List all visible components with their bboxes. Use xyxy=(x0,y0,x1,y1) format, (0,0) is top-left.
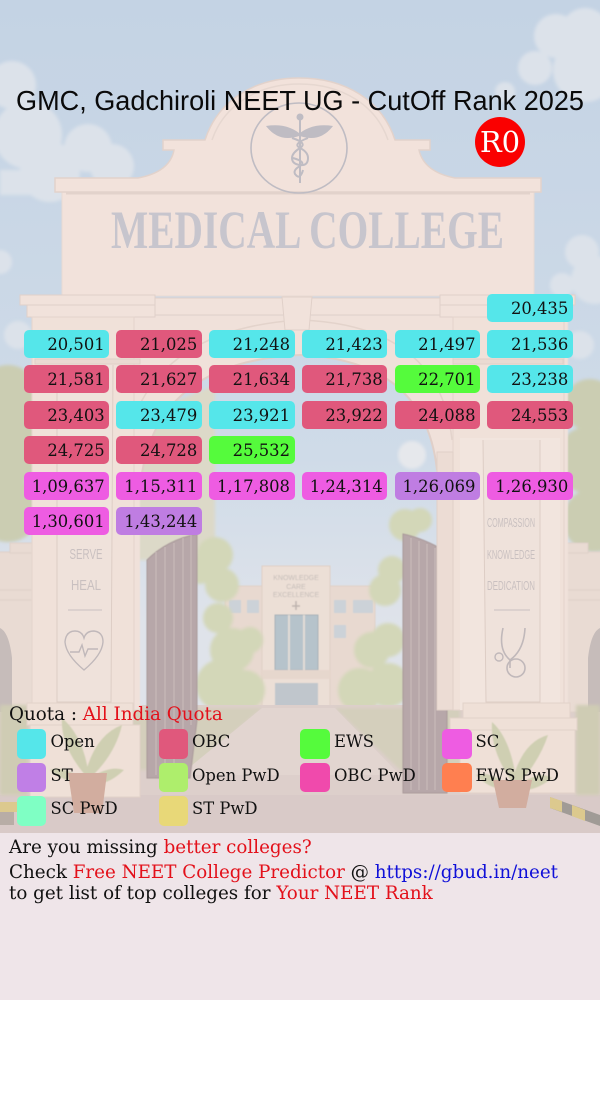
legend: Open: Open xyxy=(50,732,95,751)
campus building: CARE xyxy=(286,584,306,591)
legend: EWS PwD xyxy=(442,763,559,792)
legend: SC PwD xyxy=(17,796,118,826)
row 3: 22,701 xyxy=(418,370,476,389)
arch top tier xyxy=(62,192,534,296)
legend: EWS xyxy=(300,729,374,759)
row 4: 23,921 xyxy=(233,406,290,424)
row 3: 21,581 xyxy=(47,370,105,389)
entablature xyxy=(20,295,575,330)
quota heading: Quota : All India Quota xyxy=(9,704,223,725)
potted plants xyxy=(50,718,552,813)
row 5: 25,532 xyxy=(233,441,290,460)
legend: SC PwD: SC PwD xyxy=(50,799,118,818)
rank chips grid xyxy=(24,294,573,535)
legend: ST PwD: ST PwD xyxy=(192,799,258,818)
promo predictor link: Check Free NEET College Predictor @ https://gbud.in/neet xyxy=(9,862,558,883)
row 6: 1,24,314 xyxy=(310,476,383,496)
campus building: EXCELLENCE xyxy=(273,592,319,599)
legend: ST: ST xyxy=(50,766,73,784)
row 7 xyxy=(24,507,202,535)
row 6: 1,15,311 xyxy=(124,476,197,496)
row 3: 21,738 xyxy=(325,370,383,389)
row 4: 23,922 xyxy=(325,406,383,424)
legend: SC: SC xyxy=(476,732,499,751)
legend: Open PwD: Open PwD xyxy=(192,766,280,784)
campus building: KNOWLEDGE xyxy=(273,575,319,582)
row 4: 24,553 xyxy=(511,406,568,424)
row 4: 23,479 xyxy=(140,406,197,424)
curb stripes xyxy=(0,797,600,826)
lower promo band xyxy=(0,833,600,1000)
row 2 xyxy=(24,330,573,358)
row 1 xyxy=(487,294,573,322)
row 5: 24,725 xyxy=(47,441,105,460)
legend: EWS PwD: EWS PwD xyxy=(476,766,559,784)
promo rank line: to get list of top colleges for Your NEET Rank xyxy=(9,883,433,904)
outer hedges xyxy=(0,705,600,795)
pillar left: HEAL xyxy=(71,577,101,594)
legend: Open xyxy=(17,729,95,759)
row 4: 23,403 xyxy=(47,406,105,424)
row 6: 1,17,808 xyxy=(217,476,290,496)
row 3: 23,238 xyxy=(511,370,568,389)
legend: OBC xyxy=(159,729,230,759)
round badge R0: R0 xyxy=(480,125,520,159)
pillar right: KNOWLEDGE xyxy=(487,547,535,562)
legend: OBC PwD: OBC PwD xyxy=(334,766,416,784)
iron gates xyxy=(147,534,447,793)
row 6: 1,09,637 xyxy=(32,476,105,496)
row 2: 21,248 xyxy=(233,334,290,354)
row 3: 21,627 xyxy=(140,370,197,389)
row 1: 20,435 xyxy=(511,299,568,318)
row 6: 1,26,069 xyxy=(402,476,476,496)
round badge R0 xyxy=(475,117,525,167)
promo text block xyxy=(8,837,558,904)
row 4 xyxy=(24,401,573,429)
row 7: 1,43,244 xyxy=(124,512,197,531)
haze of trees inside arch xyxy=(130,385,215,560)
row 5: 24,728 xyxy=(140,441,197,460)
row 6: 1,26,930 xyxy=(495,476,568,496)
pillar left: SERVE xyxy=(70,546,102,563)
distant trees left/right xyxy=(0,365,600,552)
legend: OBC PwD xyxy=(300,763,416,792)
campus building xyxy=(225,566,375,716)
ground and road xyxy=(0,705,600,833)
campus trees xyxy=(186,508,432,712)
pillar left xyxy=(32,317,140,710)
legend: OBC: OBC xyxy=(192,732,230,751)
row 2: 21,423 xyxy=(325,334,383,354)
arch with opening xyxy=(32,315,568,710)
caduceus emblem xyxy=(251,103,347,193)
legend: Open PwD xyxy=(159,763,280,792)
small cloud inside arch xyxy=(398,441,426,469)
legend: SC xyxy=(442,729,499,759)
row 7: 1,30,601 xyxy=(32,512,105,531)
title: GMC, Gadchiroli NEET UG - CutOff Rank 2025 xyxy=(16,85,584,116)
row 2: 21,536 xyxy=(511,334,568,354)
row 2: 21,025 xyxy=(140,334,197,354)
row 2: 21,497 xyxy=(418,334,476,354)
legend: ST PwD xyxy=(159,796,258,826)
pillar bases xyxy=(27,703,577,797)
row 3 xyxy=(24,365,573,393)
legend: EWS: EWS xyxy=(334,732,374,751)
pillar right: DEDICATION xyxy=(487,578,535,593)
row 4: 24,088 xyxy=(418,406,476,424)
row 2: 20,501 xyxy=(47,334,105,354)
legend xyxy=(17,729,559,826)
row 5 xyxy=(24,436,295,464)
row 6 xyxy=(24,472,573,500)
side walls xyxy=(0,543,600,712)
row 3: 21,634 xyxy=(233,370,290,389)
pillar right xyxy=(437,317,564,710)
legend: ST xyxy=(17,763,73,792)
pillar right: COMPASSION xyxy=(487,515,535,530)
promo question: Are you missing better colleges? xyxy=(9,837,312,858)
